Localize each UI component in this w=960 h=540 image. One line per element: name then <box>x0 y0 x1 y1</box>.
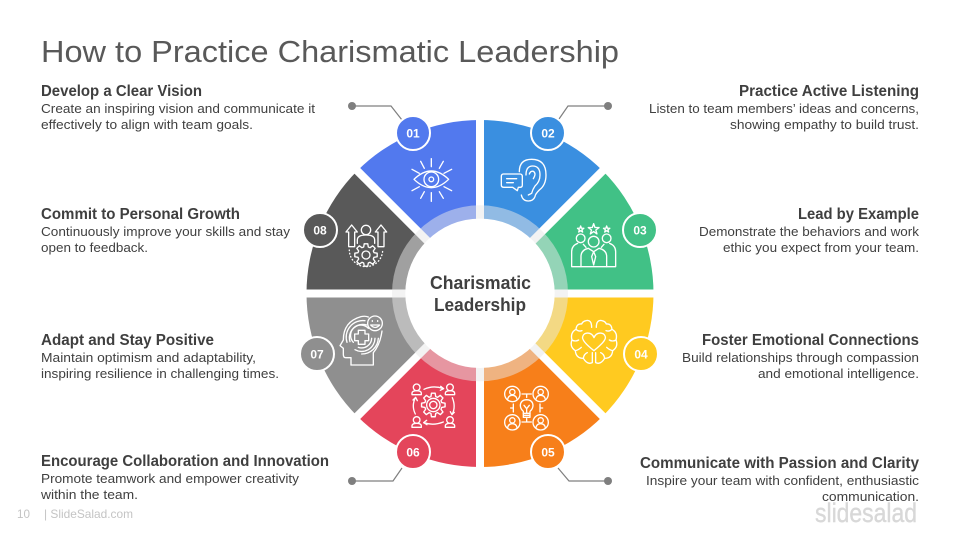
connector 01 <box>348 102 402 120</box>
text block: Commit to Personal Growth <box>41 206 291 255</box>
center label <box>430 273 531 315</box>
center label: Charismatic <box>430 273 531 293</box>
text block: Develop a Clear Vision: Create an inspiring vision and communicate it <box>41 101 315 116</box>
text block: Encourage Collaboration and Innovation: Promote teamwork and empower creativity <box>41 471 300 486</box>
connector 06 <box>348 468 402 485</box>
footer logo: slidesalad <box>815 498 917 528</box>
badge 01: 01 <box>406 126 420 140</box>
text block: Commit to Personal Growth: Continuously improve your skills and stay <box>41 224 291 239</box>
icon: eye <box>412 159 452 201</box>
text block: Adapt and Stay Positive: Maintain optimism and adaptability, <box>41 350 256 365</box>
badge 06: 06 <box>406 446 420 460</box>
badge 03 <box>623 213 657 247</box>
text block: Practice Active Listening: Practice Active Listening <box>739 83 919 100</box>
badge 08 <box>303 213 337 247</box>
text block: Commit to Personal Growth: Commit to Personal Growth <box>41 206 240 223</box>
text block: Practice Active Listening: Listen to team members’ ideas and concerns, <box>649 101 919 116</box>
wheel diagram <box>296 110 664 477</box>
badge 02 <box>531 116 565 150</box>
text block: Lead by Example: ethic you expect from your team. <box>723 240 919 255</box>
title: How to Practice Charismatic Leadership <box>41 34 619 69</box>
connector 05 <box>558 468 612 485</box>
text block: Practice Active Listening: showing empathy to build trust. <box>730 117 919 132</box>
icon: personal growth <box>346 225 387 267</box>
badge 02: 02 <box>541 126 555 140</box>
center label: Leadership <box>434 295 526 315</box>
text block: Practice Active Listening <box>649 83 919 132</box>
badge 05: 05 <box>541 446 555 460</box>
icon: collaboration gear <box>412 384 455 427</box>
badge 05 <box>531 435 565 469</box>
text block: Encourage Collaboration and Innovation: Encourage Collaboration and Innovation <box>41 453 329 470</box>
text block: Lead by Example <box>699 206 920 255</box>
text block: Lead by Example: Lead by Example <box>798 206 919 223</box>
text block: Develop a Clear Vision: Develop a Clear Vision <box>41 83 202 100</box>
segment 02 <box>480 120 603 293</box>
text block: Foster Emotional Connections: Foster Emotional Connections <box>702 332 919 349</box>
segment 06 <box>357 294 480 467</box>
connector 02 <box>559 102 612 119</box>
text block: Foster Emotional Connections: Build relationships through compassion <box>682 350 919 365</box>
text block: Communicate with Passion and Clarity <box>640 455 920 504</box>
center circle <box>405 219 555 368</box>
text block: Adapt and Stay Positive: Adapt and Stay Positive <box>41 332 214 349</box>
segment 08 <box>306 171 480 294</box>
segment 05 <box>480 294 603 467</box>
text block: Communicate with Passion and Clarity: Communicate with Passion and Clarity <box>640 455 919 472</box>
badge 07 <box>300 337 334 371</box>
text block: Commit to Personal Growth: open to feedback. <box>41 240 148 255</box>
badge 06 <box>396 435 430 469</box>
badge 04: 04 <box>634 348 648 362</box>
segment 03 <box>480 171 654 294</box>
segment 07 <box>306 294 480 416</box>
badge 01 <box>396 116 430 150</box>
text block: Adapt and Stay Positive <box>41 332 279 381</box>
text block: Develop a Clear Vision: effectively to align with team goals. <box>41 117 253 132</box>
text block: Communicate with Passion and Clarity: Inspire your team with confident, enthusiastic <box>646 473 920 488</box>
text block: Communicate with Passion and Clarity: communication. <box>822 489 919 504</box>
translucent inner ring <box>392 205 568 381</box>
badge 03: 03 <box>633 224 647 238</box>
badge 04 <box>624 337 658 371</box>
icon: idea network <box>505 386 548 430</box>
segment 01 <box>357 120 480 294</box>
segment gaps <box>296 110 664 477</box>
text block: Develop a Clear Vision <box>41 83 315 132</box>
text block: Lead by Example: Demonstrate the behaviors and work <box>699 224 920 239</box>
footer site name: | SlideSalad.com <box>44 507 133 521</box>
icon: ear and speech bubble <box>501 159 546 201</box>
icon: team with stars <box>572 224 616 267</box>
text block: Encourage Collaboration and Innovation <box>40 453 329 502</box>
text block: Adapt and Stay Positive: inspiring resilience in challenging times. <box>41 366 279 381</box>
icon: head with plus and smile <box>340 316 382 365</box>
badge 07: 07 <box>310 348 324 362</box>
icon: brain with heart <box>571 320 617 363</box>
text block: Foster Emotional Connections: and emotional intelligence. <box>758 366 919 381</box>
footer page number: 10 <box>17 507 30 521</box>
badge 08: 08 <box>313 224 327 238</box>
text block: Encourage Collaboration and Innovation: within the team. <box>40 487 138 502</box>
segment 04 <box>480 294 654 416</box>
text block: Foster Emotional Connections <box>682 332 919 381</box>
